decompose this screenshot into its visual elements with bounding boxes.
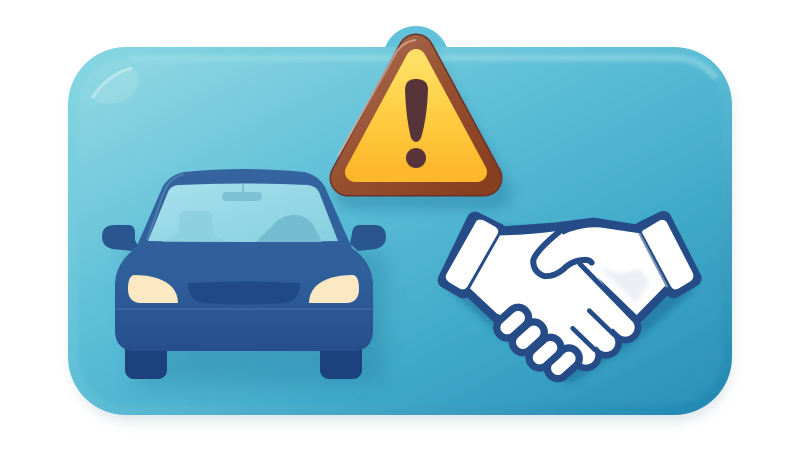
thumb and finger lines (533, 232, 635, 350)
car rear-view mirror (222, 184, 262, 201)
right hand with thumb (538, 227, 666, 315)
triangle yellow fill (355, 59, 477, 172)
handshake outline (446, 219, 693, 343)
car left headlight (128, 275, 178, 303)
car windshield (148, 184, 338, 242)
icon: car (102, 169, 386, 385)
panel gloss highlight (92, 68, 139, 104)
car body (115, 169, 373, 351)
long finger outlines (553, 290, 625, 355)
exclamation mark (405, 79, 428, 168)
icon: handshake (446, 219, 697, 384)
left hand (470, 231, 627, 357)
left cuff (446, 220, 498, 289)
car wheels (125, 340, 362, 379)
small fingers (493, 303, 583, 383)
right cuff (642, 220, 693, 289)
car mirrors (102, 225, 386, 251)
car right headlight (309, 275, 359, 303)
panel: rounded blue background (68, 26, 732, 422)
icon: warning triangle (338, 40, 494, 192)
palm shading (597, 265, 650, 303)
car seats (162, 211, 226, 242)
car grille (188, 282, 300, 304)
triangle border (348, 52, 484, 178)
